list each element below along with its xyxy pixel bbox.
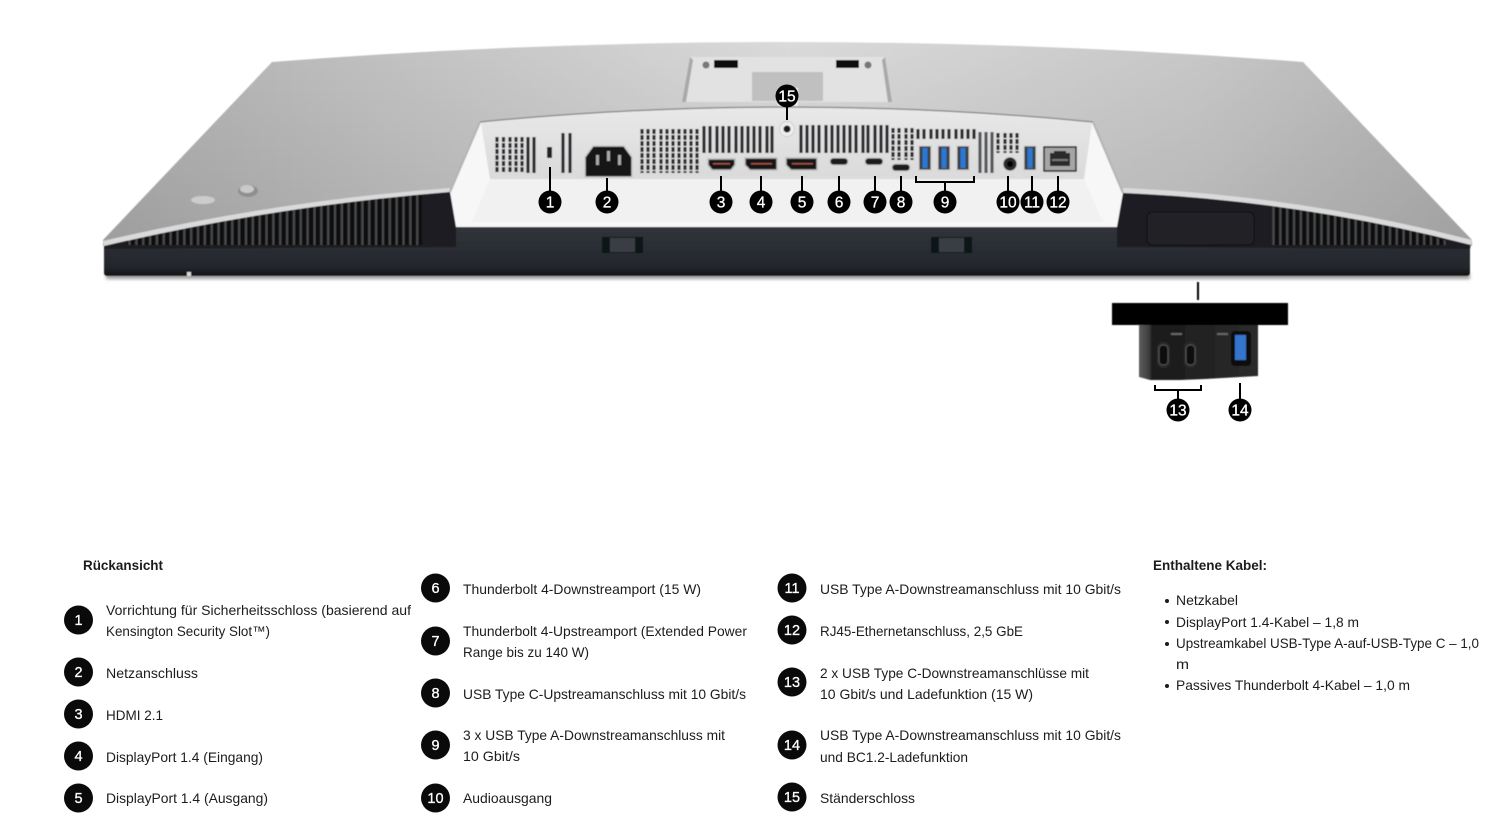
callout 5 — [790, 176, 814, 214]
legend item 6: Thunderbolt 4-Downstreamport (15 W) — [463, 581, 701, 597]
legend item 11: 11 — [784, 581, 800, 597]
left vent — [127, 190, 422, 246]
legend item 8: 8 — [431, 686, 440, 702]
legend item 14: 14 — [784, 738, 800, 754]
callout 12: 12 — [1049, 194, 1067, 212]
legend item 13: 13 — [784, 675, 800, 691]
callout 13 — [1155, 385, 1201, 422]
legend item 7: Thunderbolt 4-Upstreamport (Extended Power — [463, 623, 747, 639]
callout 2 — [596, 178, 618, 214]
legend item 12 — [778, 616, 1023, 644]
port: RJ45 — [1044, 147, 1076, 171]
callout 9 — [916, 176, 974, 214]
callout 14: 14 — [1231, 402, 1249, 420]
status led — [187, 272, 191, 276]
cable: upstream: Upstreamkabel USB-Type A-auf-USB-Type C – 1,0 — [1176, 635, 1479, 651]
legend item 6 — [421, 574, 701, 602]
legend item 5 — [64, 784, 268, 812]
legend item 4 — [64, 742, 263, 770]
power socket — [585, 146, 632, 177]
legend item 4: 4 — [74, 749, 83, 765]
port: stand lock — [780, 122, 794, 136]
callout 12 — [1046, 176, 1070, 214]
legend item 1: Vorrichtung für Sicherheitsschloss (basierend auf — [106, 602, 411, 618]
port recess — [450, 107, 1123, 227]
port: USB-C upstream — [892, 164, 910, 171]
callout 5: 5 — [798, 194, 806, 212]
legend item 9: 10 Gbit/s — [463, 748, 520, 764]
legend item 11 — [778, 574, 1121, 602]
callout 4: 4 — [757, 194, 766, 212]
monitor shadow — [106, 274, 1470, 279]
port: Thunderbolt upstream — [865, 158, 883, 165]
callout 14 — [1228, 383, 1252, 422]
legend item 13: 2 x USB Type C-Downstreamanschlüsse mit — [820, 665, 1089, 681]
port: USB-A — [1024, 146, 1036, 170]
legend item 10: Audioausgang — [463, 790, 552, 806]
cable: upstream: m — [1176, 656, 1189, 672]
legend item 7: Range bis zu 140 W) — [463, 644, 589, 660]
legend item 8 — [421, 678, 746, 708]
callout 11 — [1020, 176, 1044, 214]
legend item 9 — [421, 727, 725, 764]
legend item 14: und BC1.2-Ladefunktion — [820, 749, 968, 765]
legend item 10 — [421, 784, 552, 812]
callout 6: 6 — [835, 194, 843, 212]
heading: Enthaltene Kabel: Enthaltene Kabel: — [1153, 557, 1267, 573]
port: audio jack — [1003, 157, 1017, 171]
port: DisplayPort out — [786, 158, 817, 170]
callout 7 — [864, 176, 886, 214]
monitor rear view — [103, 42, 1472, 380]
legend item 1 — [64, 602, 411, 639]
callout 1 — [538, 167, 562, 214]
callout 4 — [750, 176, 772, 214]
heading: Rückansicht: Rückansicht — [83, 557, 163, 573]
legend item 1: Kensington Security Slot™) — [106, 623, 270, 639]
callout 10 — [996, 176, 1020, 214]
surface shading — [103, 42, 1472, 246]
security slot — [547, 147, 552, 158]
port: DisplayPort in — [745, 158, 777, 170]
callout 9: 9 — [941, 194, 949, 212]
legend item 2 — [64, 658, 198, 686]
legend item 15: Ständerschloss — [820, 790, 915, 806]
legend item 4: DisplayPort 1.4 (Eingang) — [106, 749, 263, 765]
callout 1: 1 — [546, 194, 554, 212]
legend item 10: 10 — [427, 791, 444, 807]
monitor stand mount — [682, 57, 892, 106]
left silver edge — [103, 188, 450, 246]
legend item 9: 3 x USB Type A-Downstreamanschluss mit — [463, 727, 725, 743]
callout 2: 2 — [603, 194, 611, 212]
callout 3 — [710, 176, 732, 214]
legend column 2 — [421, 574, 747, 812]
legend item 9: 9 — [431, 738, 440, 754]
power button — [191, 196, 215, 204]
legend item 6: 6 — [431, 581, 440, 597]
cable: upstream — [1165, 635, 1479, 672]
legend item 14 — [778, 727, 1121, 765]
callout 15: 15 — [778, 88, 796, 106]
cable: power: Netzkabel — [1176, 592, 1238, 608]
legend item 15 — [778, 782, 915, 812]
legend item 5: DisplayPort 1.4 (Ausgang) — [106, 790, 268, 806]
legend column 1 — [64, 557, 411, 812]
legend item 3: HDMI 2.1 — [106, 707, 163, 723]
inset: front bezel bar — [1112, 303, 1288, 325]
callout 11: 11 — [1024, 194, 1040, 212]
callout 8 — [890, 176, 912, 214]
legend item 12: RJ45-Ethernetanschluss, 2,5 GbE — [820, 623, 1023, 639]
legend item 7 — [421, 623, 747, 660]
callout 6 — [828, 176, 850, 214]
right silver edge — [1123, 188, 1472, 245]
legend item 11: USB Type A-Downstreamanschluss mit 10 Gbit/s — [820, 581, 1121, 597]
left clip — [602, 237, 643, 253]
legend item 8: USB Type C-Upstreamanschluss mit 10 Gbit/s — [463, 686, 746, 702]
cable: DisplayPort: DisplayPort 1.4-Kabel – 1,8 m — [1176, 614, 1359, 630]
ports: three USB-A — [919, 146, 969, 170]
callout 8: 8 — [897, 194, 905, 212]
monitor back surface — [103, 42, 1472, 246]
legend item 3 — [64, 700, 163, 728]
legend column 3 — [778, 574, 1121, 812]
callout 15 — [776, 84, 798, 120]
right vent — [1272, 206, 1446, 246]
legend item 13: 10 Gbit/s und Ladefunktion (15 W) — [820, 686, 1033, 702]
front edge of the monitor — [104, 190, 1471, 276]
inset: side port module — [1139, 325, 1258, 380]
legend item 1: 1 — [74, 613, 83, 629]
cable: Thunderbolt: Passives Thunderbolt 4-Kabel – 1,0 m — [1176, 677, 1410, 693]
joystick — [238, 185, 258, 197]
legend item 3: 3 — [74, 707, 83, 723]
legend item 13 — [778, 665, 1089, 702]
callout 10: 10 — [999, 194, 1017, 212]
callout 13: 13 — [1169, 402, 1187, 420]
legend item 14: USB Type A-Downstreamanschluss mit 10 Gbit/s — [820, 727, 1121, 743]
legend item 2: Netzanschluss — [106, 665, 198, 681]
legend item 7: 7 — [431, 634, 440, 650]
connector line to inset — [1197, 282, 1199, 300]
callout 3: 3 — [717, 194, 725, 212]
central dark strip — [456, 227, 1117, 276]
right clip — [931, 237, 972, 253]
legend item 2: 2 — [74, 665, 83, 681]
rear vents — [497, 125, 1017, 173]
legend item 15: 15 — [784, 790, 800, 806]
legend item 5: 5 — [74, 791, 83, 807]
cable cover handle — [1147, 212, 1254, 245]
port: Thunderbolt downstream — [830, 158, 848, 165]
included cables list — [1153, 557, 1479, 693]
legend item 12: 12 — [784, 623, 800, 639]
callout 7: 7 — [871, 194, 879, 212]
port: HDMI — [708, 159, 735, 170]
